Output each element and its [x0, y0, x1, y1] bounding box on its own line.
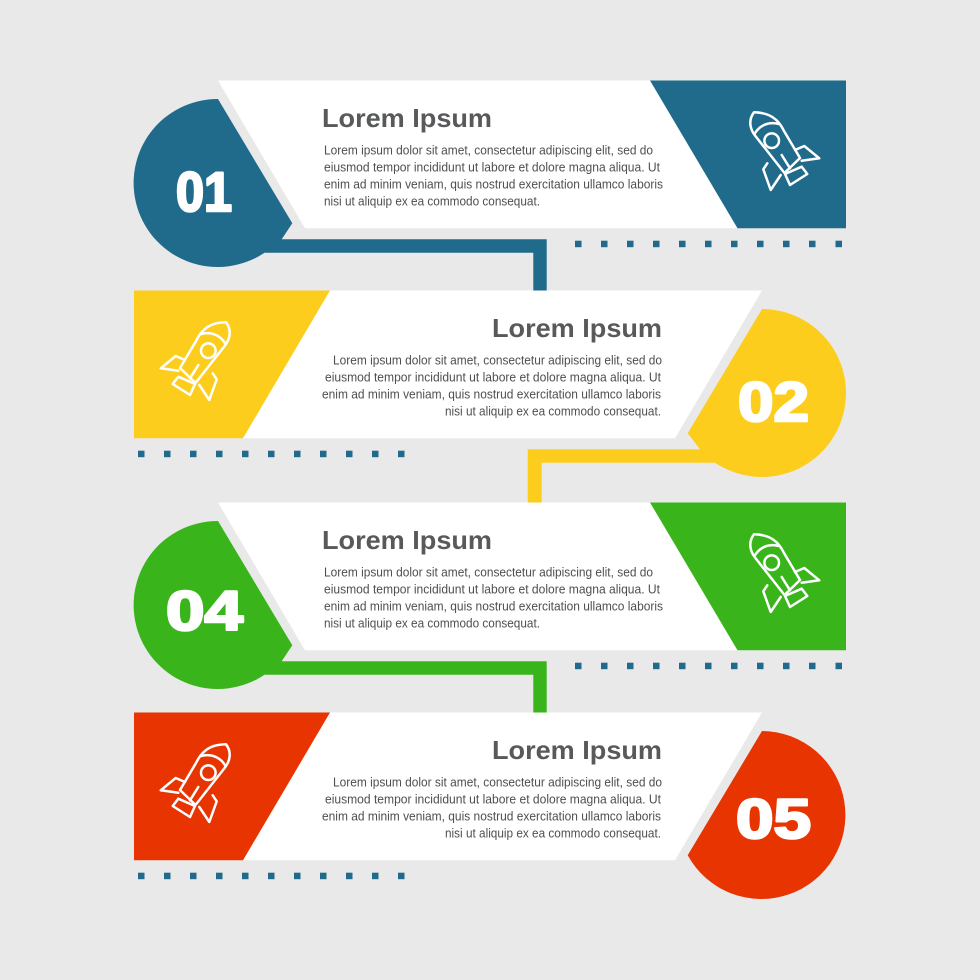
red number badge: [688, 731, 845, 899]
blue icon block 01: [650, 80, 846, 228]
body text 01: Lorem ipsum dolor sit amet, consectetur adipiscing elit, sed do: [324, 144, 653, 158]
body text 02: Lorem ipsum dolor sit amet, consectetur adipiscing elit, sed do: [333, 354, 662, 368]
heading 05: Lorem Ipsum: [492, 735, 662, 765]
body text 02: eiusmod tempor incididunt ut labore et dolore magna aliqua. Ut: [325, 370, 662, 384]
body text 04: eiusmod tempor incididunt ut labore et dolore magna aliqua. Ut: [324, 582, 661, 596]
dotted line 04: [575, 663, 842, 669]
yellow number badge and connector: [528, 309, 846, 502]
body text 01: nisi ut aliquip ex ea commodo consequat.: [324, 194, 540, 208]
body text 01: enim ad minim veniam, quis nostrud exercitation ullamco laboris: [324, 178, 663, 192]
body text 05: Lorem ipsum dolor sit amet, consectetur adipiscing elit, sed do: [333, 776, 662, 790]
white text banner 02: [242, 290, 762, 438]
body text 02: [322, 354, 662, 418]
body text 05: nisi ut aliquip ex ea commodo consequat.: [445, 826, 661, 840]
body text 04: Lorem ipsum dolor sit amet, consectetur adipiscing elit, sed do: [324, 566, 653, 580]
green number badge and connector: [134, 521, 547, 712]
body text 05: [322, 776, 662, 840]
number 02: 02: [738, 370, 809, 433]
body text 05: eiusmod tempor incididunt ut labore et dolore magna aliqua. Ut: [325, 792, 662, 806]
icon: rocket 02: [161, 322, 230, 400]
body text 01: eiusmod tempor incididunt ut labore et dolore magna aliqua. Ut: [324, 160, 661, 174]
dotted line 05: [138, 873, 404, 879]
number 05: 05: [736, 787, 811, 850]
number 04: 04: [166, 579, 243, 642]
icon: rocket 05: [161, 744, 230, 822]
green icon block 04: [650, 502, 846, 650]
heading 01: Lorem Ipsum: [322, 103, 492, 133]
body text 04: enim ad minim veniam, quis nostrud exercitation ullamco laboris: [324, 600, 663, 614]
icon: rocket 01: [750, 112, 819, 190]
blue number badge and connector: [134, 99, 547, 290]
panel: step 02: [134, 290, 846, 502]
body text 01: [324, 144, 663, 208]
body text 02: nisi ut aliquip ex ea commodo consequat.: [445, 404, 661, 418]
white text banner 01: [218, 80, 738, 228]
panel: step 01: [134, 80, 846, 290]
dotted line 02: [138, 451, 404, 457]
body text 04: nisi ut aliquip ex ea commodo consequat.: [324, 616, 540, 630]
heading 02: Lorem Ipsum: [492, 313, 662, 343]
dotted line 01: [575, 241, 842, 247]
body text 05: enim ad minim veniam, quis nostrud exercitation ullamco laboris: [322, 810, 661, 824]
red icon block 05: [134, 712, 330, 860]
body text 02: enim ad minim veniam, quis nostrud exercitation ullamco laboris: [322, 388, 661, 402]
body text 04: [324, 566, 663, 630]
white text banner 04: [218, 502, 738, 650]
yellow icon block 02: [134, 290, 330, 438]
icon: rocket 04: [750, 534, 819, 612]
white text banner 05: [242, 712, 762, 860]
number 01: 01: [176, 160, 232, 223]
heading 04: Lorem Ipsum: [322, 525, 492, 555]
panel: step 04: [134, 502, 846, 712]
panel: step 05: [134, 712, 845, 899]
